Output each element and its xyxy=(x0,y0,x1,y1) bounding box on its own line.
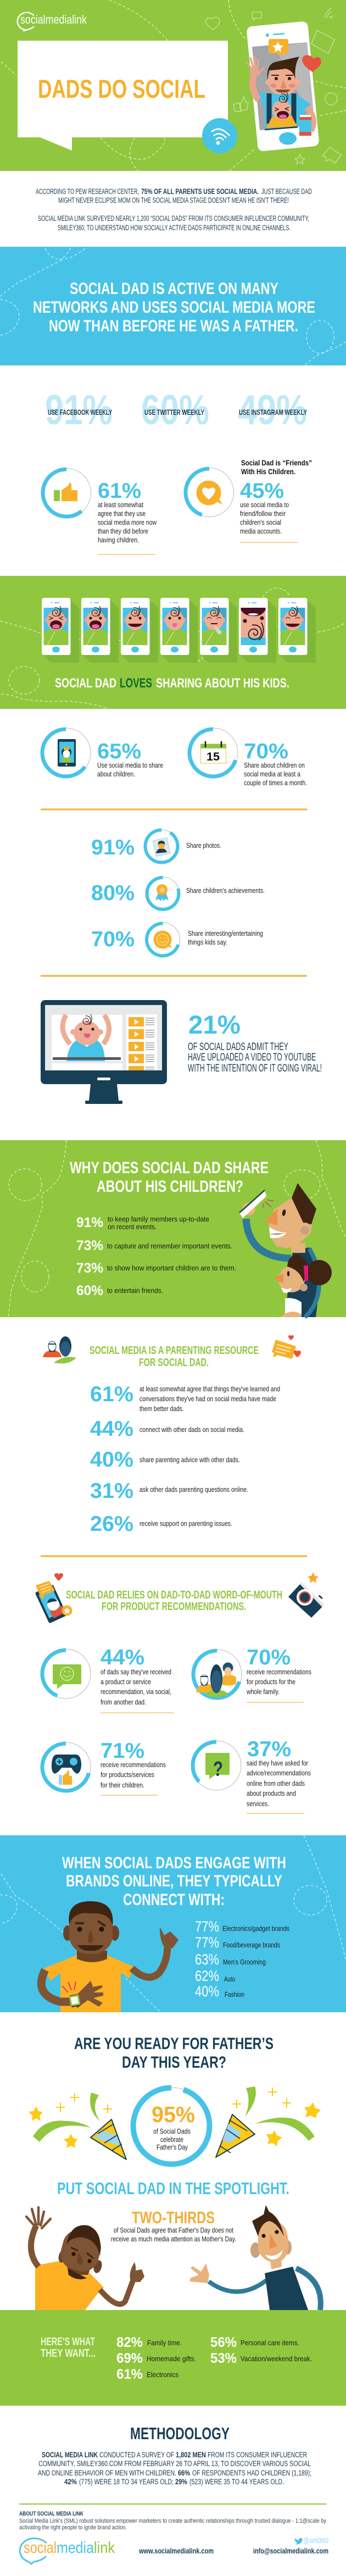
stat: 44% received recommendation: of dads say they've received xyxy=(101,1668,171,1676)
panel: active on many networks: SOCIAL DAD IS ACTIVE ON MANY xyxy=(70,280,278,298)
about text xyxy=(19,2511,326,2531)
intro text: JUST BECAUSE DAD xyxy=(261,187,312,196)
icon: question chat: ? xyxy=(213,1758,223,1781)
icon: camera with star xyxy=(288,1572,324,1618)
panel: here's what they want: 56% xyxy=(210,2335,237,2350)
icon: heart chat xyxy=(197,480,222,506)
heading: father's day: DAY THIS YEAR? xyxy=(122,2053,226,2072)
parenting stat list: 40% xyxy=(90,1448,133,1472)
stat: 44% received recommendation: from another dad. xyxy=(101,1698,146,1706)
heading xyxy=(70,1159,269,1196)
stat: 61% use social more: social media more now xyxy=(98,518,157,526)
stat: 45% friends with children: With His Children. xyxy=(241,467,295,476)
phone: crying baby xyxy=(42,598,79,663)
brand list: 40% xyxy=(195,1983,219,2000)
icon: two dads xyxy=(43,1336,76,1363)
phone: tongue out baby xyxy=(160,598,198,663)
confetti left xyxy=(29,2092,126,2159)
stat: 61% use social more: than they did before xyxy=(98,527,148,535)
brand list: Food/beverage brands xyxy=(223,1941,280,1949)
section: word-of-mouth heading xyxy=(35,1572,324,1624)
stat: 61% use social more xyxy=(42,468,157,555)
parenting stat list: 44% xyxy=(90,1417,133,1441)
stat: 45% friends with children: 45% xyxy=(240,479,284,503)
heading xyxy=(62,1854,286,1909)
stat: 91% share photos: 91% xyxy=(91,836,135,859)
intro text: ACCORDING TO PEW RESEARCH CENTER, xyxy=(36,187,139,196)
methodology: OF RESPONDENTS HAD CHILDREN (1,189); xyxy=(192,2469,311,2477)
stat: 45% friends with children: friend/follow their xyxy=(240,509,286,518)
brand list: Electronics/gadget brands xyxy=(222,1924,289,1933)
stat: 44% received recommendation: a product or service xyxy=(101,1678,151,1686)
intro text: 75% OF ALL PARENTS USE SOCIAL MEDIA. xyxy=(141,187,259,196)
methodology: CONDUCTED A SURVEY OF xyxy=(99,2451,174,2459)
heading xyxy=(55,676,289,691)
stat: 37% asked for advice: advice/recommendations xyxy=(247,1769,311,1777)
parenting stat list xyxy=(90,1383,280,1536)
stat: 70% share monthly: couple of times a month. xyxy=(244,779,307,787)
heading: WHY DOES SOCIAL DAD SHARE xyxy=(70,1159,269,1177)
section: parenting resource heading xyxy=(43,1335,301,1369)
stat: 61% use social more: 61% xyxy=(98,479,141,503)
stat: 70% share monthly xyxy=(188,728,307,787)
reason list: 60% xyxy=(76,1283,103,1298)
stat: 70% share kids sayings: things kids say. xyxy=(188,938,227,946)
methodology: AND ONLINE BEHAVIOR OF MEN WITH CHILDREN. xyxy=(38,2469,176,2477)
twitter handle and email: @sml360 xyxy=(303,2536,328,2545)
icon: photo xyxy=(153,838,170,856)
stat: weekly network use: 49% xyxy=(238,387,307,434)
stat: 70% share kids sayings xyxy=(91,923,263,957)
brand list: 77% xyxy=(195,1934,219,1951)
stat: 45% friends with children xyxy=(185,458,312,543)
twitter handle and email xyxy=(253,2536,328,2555)
about text: activating the right people to ignite brand action. xyxy=(19,2524,127,2531)
heading: ABOUT HIS CHILDREN? xyxy=(97,1178,243,1196)
stat: 21% viral video: 21% xyxy=(188,1010,241,1039)
brand list: 77% xyxy=(195,1918,219,1935)
about text: ABOUT SOCIAL MEDIA LINK xyxy=(19,2511,83,2517)
stat: 37% asked for advice: online from other dads xyxy=(247,1779,305,1787)
reason list: to entertain friends. xyxy=(107,1286,163,1295)
stat: 70% family recommendations: 70% xyxy=(247,1646,291,1669)
stat: 70% family recommendations: for products for the xyxy=(247,1678,295,1686)
stat: 37% asked for advice: 37% xyxy=(247,1737,291,1761)
heading: father's day xyxy=(74,2035,274,2072)
methodology xyxy=(38,2424,311,2486)
parenting stat list: 61% xyxy=(90,1383,133,1406)
stat: 37% asked for advice: said they have asked for xyxy=(247,1759,309,1767)
panel: here's what they want: 61% xyxy=(116,2367,143,2382)
icon: chat with hearts xyxy=(272,1335,301,1359)
stat: 45% friends with children: use social media to xyxy=(240,501,289,509)
speech bubble with title: DADS DO SOCIAL xyxy=(38,74,205,103)
methodology: 66% xyxy=(178,2469,190,2477)
stat: 95% celebrate father's day: 95% xyxy=(152,2102,195,2127)
methodology: 42% xyxy=(64,2478,77,2486)
panel: here's what they want xyxy=(0,2310,346,2406)
section: word-of-mouth heading: FOR PRODUCT RECOMMENDATIONS. xyxy=(102,1601,246,1613)
stat: 21% viral video: OF SOCIAL DADS ADMIT THEY xyxy=(188,1041,288,1053)
stat: 37% asked for advice xyxy=(192,1737,311,1814)
stat: 71% recommendations for children xyxy=(41,1739,166,1796)
reason list: 73% xyxy=(76,1238,103,1253)
stat: 71% recommendations for children: 71% xyxy=(101,1739,144,1763)
heart xyxy=(302,55,321,72)
icon: tablet with chat xyxy=(35,1573,72,1624)
panel: why does social dad share xyxy=(0,1140,346,1317)
icon: question chat xyxy=(205,1753,230,1781)
stat: 70% share monthly: social media at least a xyxy=(244,770,301,778)
section: parenting resource heading: FOR SOCIAL DAD. xyxy=(139,1357,209,1369)
methodology: (775) WERE 18 TO 34 YEARS OLD; xyxy=(79,2478,174,2486)
reason list: to show how important children are to them. xyxy=(107,1264,236,1272)
parenting stat list: 26% xyxy=(90,1512,133,1536)
methodology: FROM ITS CONSUMER INFLUENCER xyxy=(208,2451,307,2459)
brand list: 63% xyxy=(195,1951,219,1968)
intro text xyxy=(36,187,312,232)
stat: 44% received recommendation xyxy=(41,1646,174,1713)
illustration: waving dad left xyxy=(26,2207,144,2310)
stat: 61% use social more: having children. xyxy=(98,536,139,544)
stat: 65% share about children: about children. xyxy=(97,770,135,778)
stat: 95% celebrate father's day: of Social Dads xyxy=(153,2127,191,2135)
stat: 44% received recommendation: recommendation, via social, xyxy=(101,1687,171,1696)
stat: 95% celebrate father's day: celebrate xyxy=(160,2135,183,2144)
phone row: baby faces xyxy=(42,598,316,663)
icon: calendar xyxy=(200,741,226,763)
heading: BRANDS ONLINE, THEY TYPICALLY xyxy=(66,1872,282,1890)
stat: weekly network use: 91% xyxy=(45,387,113,434)
stat: 21% viral video xyxy=(188,1010,322,1074)
two-thirds text: of Social Dads agree that Father's Day does not xyxy=(114,2226,233,2234)
stat: 65% share about children xyxy=(41,728,163,778)
parenting stat list: connect with other dads on social media. xyxy=(139,1425,244,1434)
panel: here's what they want: 69% xyxy=(116,2351,143,2366)
footer logo xyxy=(20,2539,115,2564)
stat: 80% share achievements xyxy=(91,877,265,910)
stat: 45% friends with children: media accounts. xyxy=(240,527,282,535)
panel: here's what they want: Family time. xyxy=(147,2339,182,2347)
stat: 95% celebrate father's day: Father's Day xyxy=(157,2143,188,2151)
reason list: 91% xyxy=(76,1215,103,1230)
logo: socialmedialink xyxy=(18,13,87,31)
stat: 71% recommendations for children: for products/services xyxy=(101,1770,154,1779)
phone: sleeping baby xyxy=(200,598,237,663)
icon: green smile chat xyxy=(53,1664,81,1689)
stat: 70% family recommendations: whole family. xyxy=(246,1687,280,1696)
icon: medal xyxy=(155,884,169,901)
panel: here's what they want: Vacation/weekend break. xyxy=(241,2355,312,2363)
parenting stat list: 31% xyxy=(90,1479,133,1503)
icon: calendar: 15 xyxy=(207,751,220,763)
two-thirds text xyxy=(111,2208,236,2243)
icon: thumbs up xyxy=(54,482,77,501)
phone: happy baby xyxy=(278,598,316,663)
stat: 95% celebrate father's day xyxy=(133,2088,210,2164)
stat: weekly network use: USE INSTAGRAM WEEKLY xyxy=(239,408,307,417)
website: www.socialmedialink.com xyxy=(138,2546,214,2555)
stat: weekly network use: 60% xyxy=(141,387,209,434)
illustration: dad with smartwatch xyxy=(41,1901,178,2012)
panel: here's what they want: Electronics xyxy=(147,2370,178,2379)
phone: shouting baby xyxy=(81,598,119,663)
reason list: to keep family members up-to-date xyxy=(108,1215,209,1223)
decorative social icons xyxy=(205,8,341,164)
section: parenting resource heading: SOCIAL MEDIA IS A PARENTING RESOURCE xyxy=(90,1345,259,1357)
icon: smile chat xyxy=(154,931,172,948)
stat: weekly network use: USE FACEBOOK WEEKLY xyxy=(48,408,112,417)
stat: 65% share about children: Use social media to share xyxy=(97,761,163,769)
heading: WHEN SOCIAL DADS ENGAGE WITH xyxy=(62,1854,286,1872)
methodology: SOCIAL MEDIA LINK xyxy=(42,2451,98,2459)
stat: 44% received recommendation: 44% xyxy=(101,1646,144,1669)
panel: loves sharing about his kids xyxy=(0,576,346,709)
stat: 61% use social more: at least somewhat xyxy=(98,501,143,509)
stat: 70% share monthly: 70% xyxy=(244,740,288,763)
parenting stat list: share parenting advice with other dads. xyxy=(139,1456,240,1464)
stat: 80% share achievements: Share children's achievements. xyxy=(186,886,265,895)
reason list: to capture and remember important events. xyxy=(107,1242,232,1250)
stat: 61% use social more: agree that they use xyxy=(98,509,146,518)
phone with dad and baby xyxy=(246,21,321,152)
stat: 65% share about children: 65% xyxy=(97,740,141,763)
stat: 45% friends with children: Social Dad is “Friends” xyxy=(241,458,312,467)
heading: SHARING ABOUT HIS KIDS. xyxy=(156,676,289,691)
stat: 71% recommendations for children: for their children. xyxy=(101,1781,144,1789)
heading: father's day: ARE YOU READY FOR FATHER’S xyxy=(74,2035,274,2053)
parenting stat list: them better dads. xyxy=(139,1404,184,1413)
methodology: 29% xyxy=(175,2478,187,2486)
two-thirds text: receive as much media attention as Mother's Day. xyxy=(111,2235,236,2243)
panel: here's what they want: Personal care items. xyxy=(241,2339,299,2347)
reason list xyxy=(76,1215,236,1298)
stat: 71% recommendations for children: receive recommendations xyxy=(101,1761,166,1769)
footer logo: link xyxy=(94,2539,115,2557)
panel: here's what they want: 82% xyxy=(116,2335,143,2350)
methodology: METHODOLOGY xyxy=(130,2424,230,2443)
stat: 45% friends with children: children's social xyxy=(240,518,281,526)
brand list: Auto xyxy=(224,1975,235,1983)
stat: 80% share achievements: 80% xyxy=(91,881,135,905)
footer logo: media xyxy=(57,2539,94,2557)
footer logo: social xyxy=(24,2539,57,2557)
phone: close-up baby xyxy=(239,598,276,663)
brand list: Men's Grooming xyxy=(223,1958,266,1966)
methodology: (523) WERE 35 TO 44 YEARS OLD. xyxy=(189,2478,284,2486)
parenting stat list: ask other dads parenting questions online. xyxy=(139,1485,248,1494)
illustration: waving dad right xyxy=(190,2205,321,2310)
hero panel xyxy=(0,0,346,171)
stat: 70% share monthly: Share about children on xyxy=(244,761,305,769)
icon: wifi circle xyxy=(202,118,237,153)
parenting stat list: at least somewhat agree that things they've learned and xyxy=(139,1385,280,1393)
stat: 37% asked for advice: about products and xyxy=(247,1789,296,1797)
panel: here's what they want: HERE’S WHAT xyxy=(41,2336,95,2348)
stat: 91% share photos: Share photos. xyxy=(186,841,221,850)
speech bubble with title xyxy=(18,41,228,151)
logo: socialmedialink: socialmedialink xyxy=(20,13,87,26)
stat: 37% asked for advice: services. xyxy=(247,1800,269,1808)
reason list: on recent events. xyxy=(108,1223,157,1231)
icon: monitor with video xyxy=(41,1000,167,1104)
heading: CONNECT WITH: xyxy=(123,1891,225,1909)
star chat bubble xyxy=(269,39,288,57)
parenting stat list: receive support on parenting issues. xyxy=(139,1519,232,1528)
brand list: 62% xyxy=(195,1968,219,1984)
stat: 70% share kids sayings: 70% xyxy=(91,928,135,951)
panel: here's what they want: THEY WANT... xyxy=(41,2347,96,2360)
methodology: 1,802 MEN xyxy=(176,2451,206,2459)
stat: weekly network use: USE TWITTER WEEKLY xyxy=(144,408,204,417)
brand list xyxy=(195,1918,289,2000)
reason list: 73% xyxy=(76,1261,103,1276)
parenting stat list: conversations they've had on social media have made xyxy=(139,1395,276,1403)
panel: here's what they want: 53% xyxy=(210,2351,237,2366)
panel: active on many networks xyxy=(0,247,346,365)
panel: brands social dads connect with xyxy=(0,1835,346,2012)
heading: LOVES xyxy=(120,676,152,691)
two-thirds text: TWO-THIRDS xyxy=(132,2208,215,2227)
stat: 91% share photos xyxy=(91,830,221,863)
confetti right xyxy=(216,2086,321,2157)
icon: game controller xyxy=(52,1755,81,1785)
heading: SOCIAL DAD xyxy=(55,676,116,691)
stat: weekly network use xyxy=(45,387,307,434)
stat: 70% share kids sayings: Share interesting/entertaining xyxy=(188,929,263,937)
phone: smiling baby xyxy=(121,598,158,663)
illustration: dad taking selfie with daughter xyxy=(239,1183,332,1317)
brand list: Fashion xyxy=(225,1990,244,1998)
stat: 70% family recommendations xyxy=(192,1646,311,1703)
panel: here's what they want: Homemade gifts. xyxy=(147,2355,196,2363)
icon: three people xyxy=(196,1663,236,1697)
icon: tablet xyxy=(58,739,76,767)
stat: 70% family recommendations: receive recommendations xyxy=(247,1668,311,1676)
